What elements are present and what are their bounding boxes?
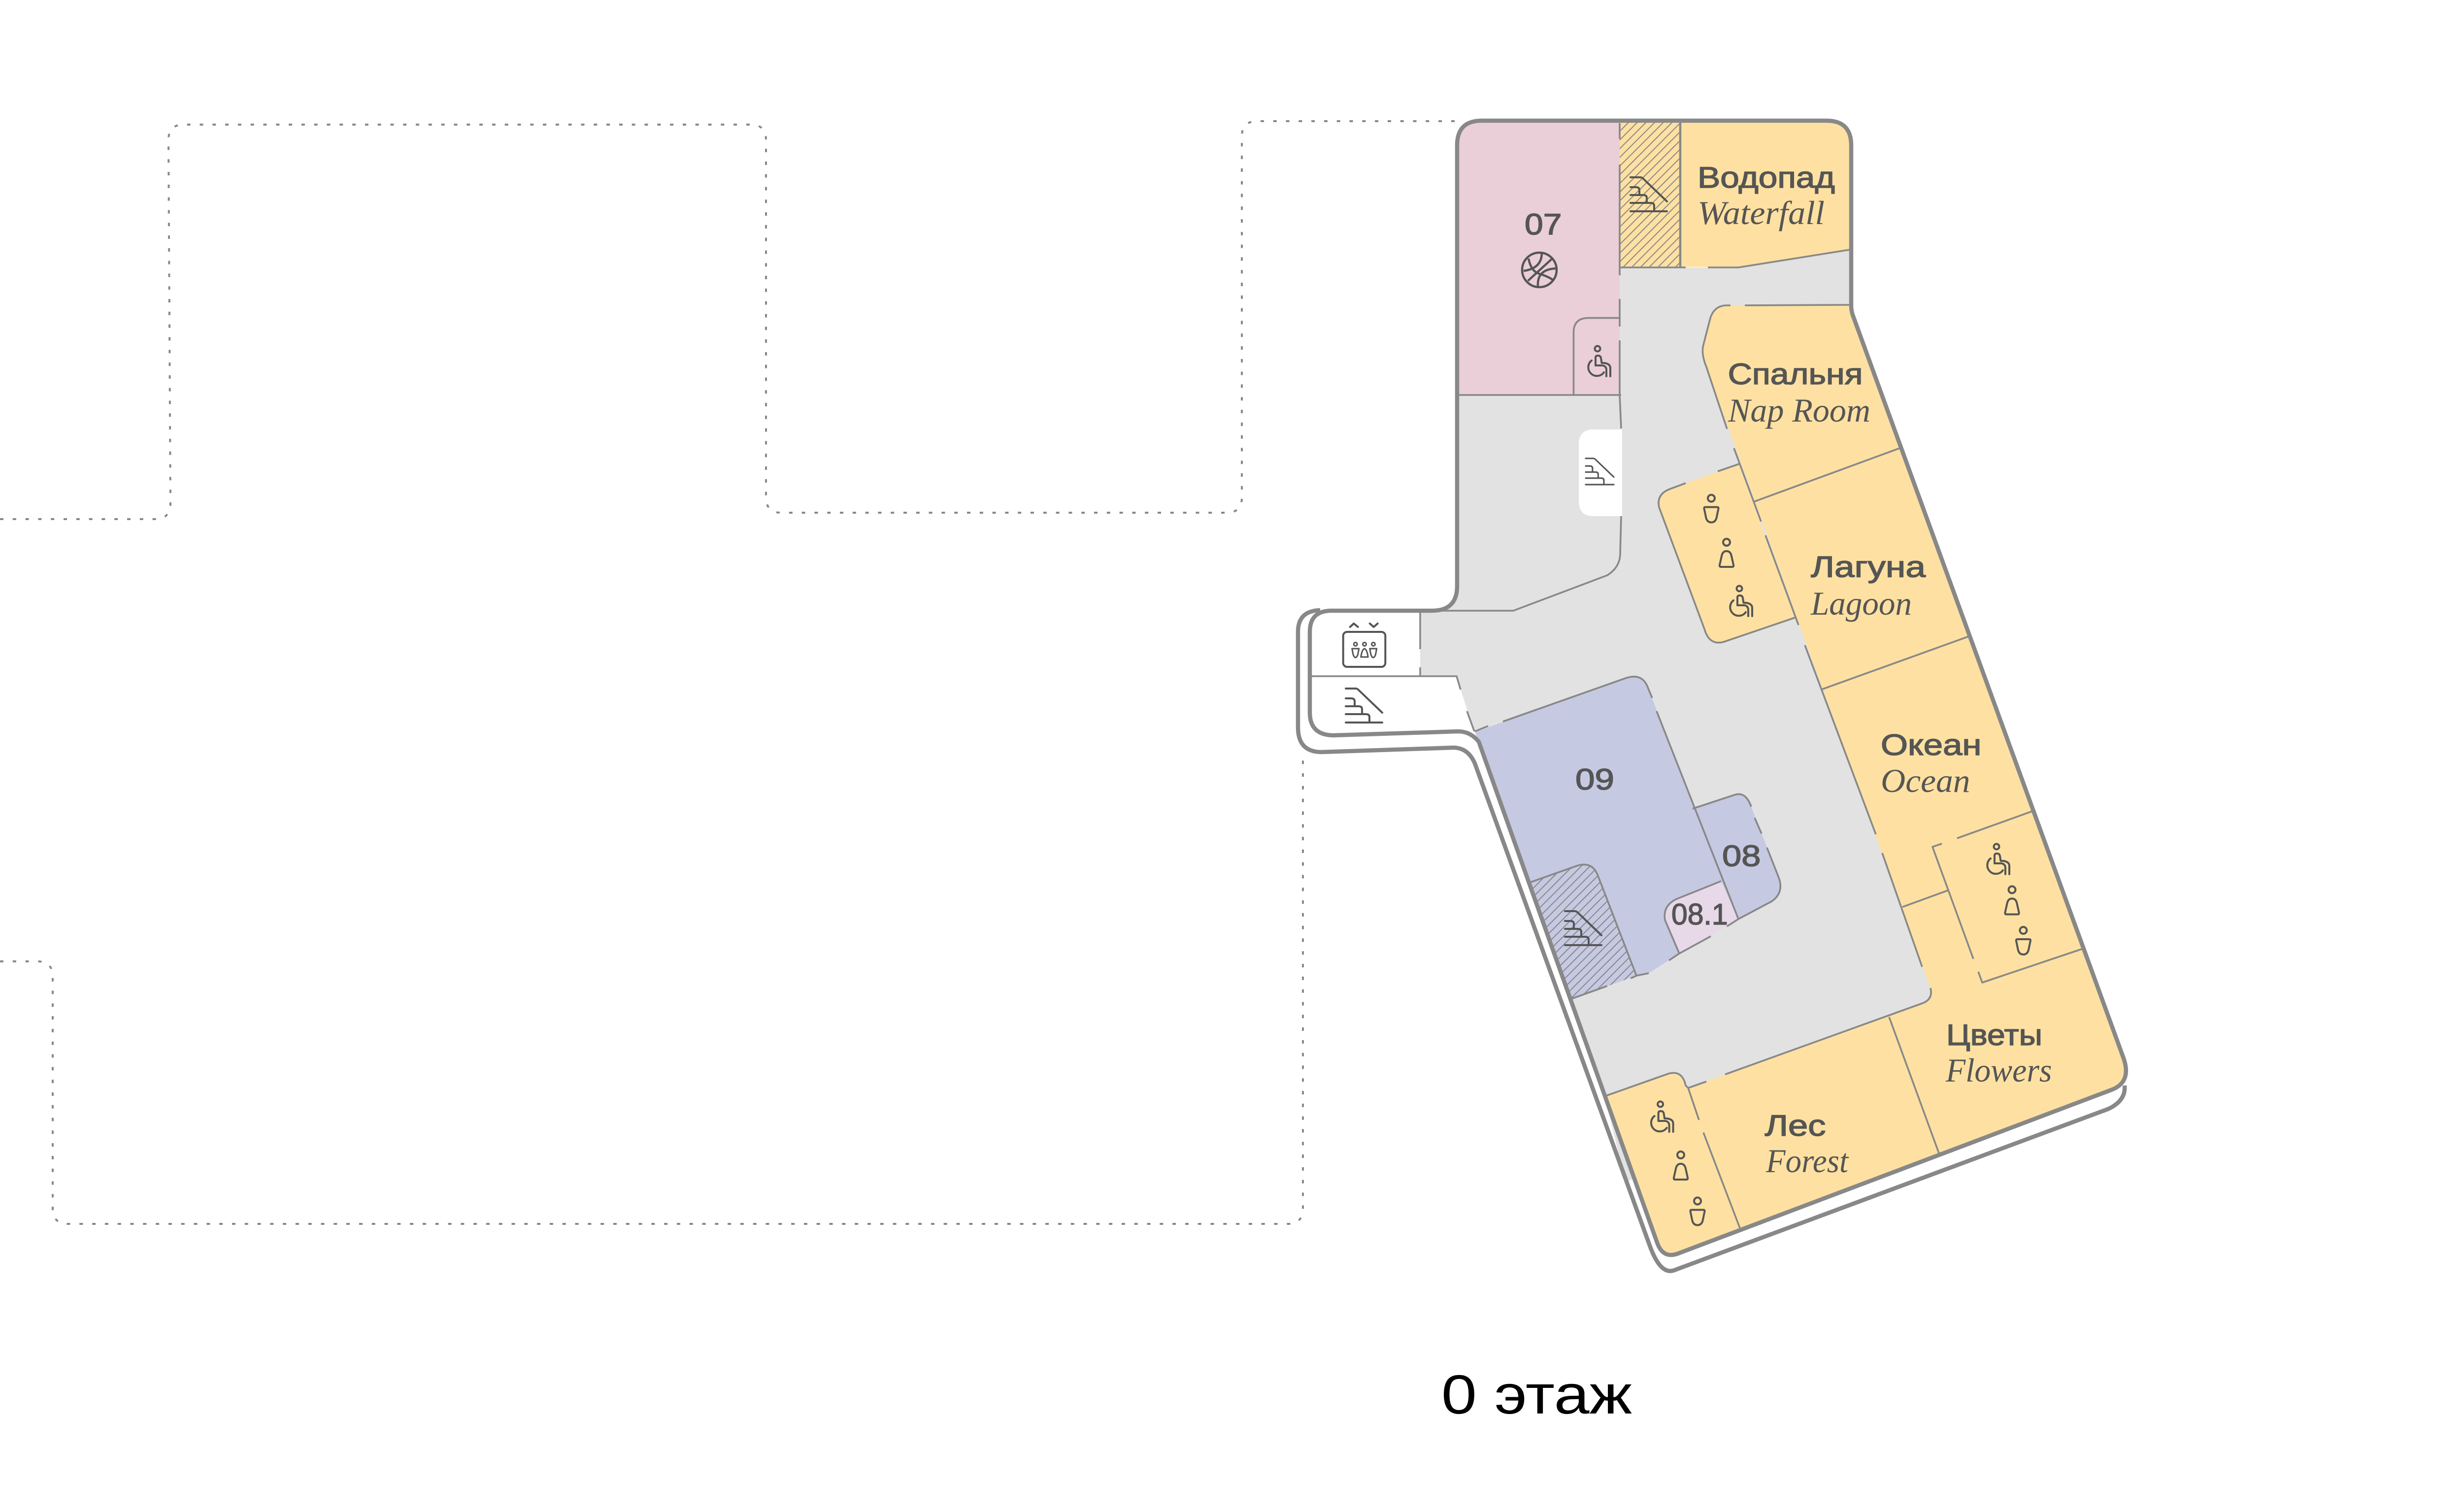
- label: Nap Room: Спальня: [1728, 358, 1863, 391]
- panel: room 07: [1457, 121, 1620, 395]
- icon: wheelchair, Ocean block: [1987, 844, 2009, 874]
- icon: wheelchair, room 07: [1588, 346, 1610, 376]
- panel: toilets block near Lagoon: [1659, 464, 1795, 643]
- label: Flowers: Flowers: [1945, 1052, 2052, 1089]
- label: Ocean: Океан: [1881, 728, 1981, 761]
- label: Nap Room: [1728, 358, 1870, 429]
- dotted outline: upper neighbouring building: [0, 121, 1457, 519]
- outer wall, outer line: [1298, 610, 2125, 1271]
- icon: lift: [1343, 624, 1385, 667]
- label: 08: 08: [1722, 839, 1761, 873]
- icon: toilet cup, Forest block: [1690, 1198, 1705, 1225]
- icon: stairs, top: [1631, 177, 1667, 211]
- label: Ocean: Ocean: [1881, 762, 1970, 799]
- icon: toilet cup, Ocean block: [2016, 927, 2030, 954]
- icon: stairs, lobby: [1346, 689, 1382, 723]
- label: 07: 07: [1525, 208, 1562, 241]
- label: Flowers: [1945, 1019, 2052, 1089]
- icon: wheelchair, Lagoon block: [1730, 586, 1752, 616]
- panel: hatched stairs in room 09: [1528, 864, 1636, 1000]
- title: 0 этаж: [1441, 1364, 1632, 1425]
- icon: toilet bell, Forest block: [1674, 1151, 1688, 1180]
- label: Waterfall: Waterfall: [1697, 194, 1825, 231]
- label: 09: 09: [1575, 763, 1614, 796]
- panel: yellow rooms along right wall: [1604, 305, 2126, 1255]
- label: Forest: Forest: [1765, 1142, 1849, 1180]
- icon: basketball: [1522, 253, 1557, 287]
- icon: toilet cup, Lagoon block: [1704, 495, 1719, 523]
- outer wall, inner line: [1310, 121, 2126, 1255]
- panel: room 08.1: [1664, 881, 1738, 953]
- icon: toilet bell, Ocean block: [2005, 887, 2019, 914]
- label: Lagoon: Лагуна: [1811, 551, 1926, 583]
- label: Forest: [1764, 1109, 1849, 1180]
- panel: room 09: [1475, 677, 1738, 1000]
- label: 08.1: 08.1: [1671, 898, 1728, 931]
- panel: room 08: [1693, 794, 1780, 919]
- icon: toilet bell, Lagoon block: [1720, 539, 1733, 567]
- room partitions: [1310, 123, 2083, 1229]
- label: Ocean: [1881, 728, 1981, 799]
- label: Nap Room: Nap Room: [1728, 392, 1870, 429]
- label: Forest: Лес: [1764, 1109, 1826, 1142]
- label: Lagoon: Lagoon: [1810, 585, 1912, 622]
- label: Flowers: Цветы: [1946, 1019, 2042, 1052]
- label: Waterfall: Водопад: [1697, 161, 1835, 194]
- panel: hatched stairs, top: [1620, 121, 1680, 267]
- icon: stairs, room 09: [1565, 911, 1601, 945]
- label: Lagoon: [1810, 551, 1926, 622]
- icon: stairs, niche: [1586, 459, 1614, 485]
- icon: wheelchair, Forest block: [1651, 1101, 1673, 1132]
- label: Waterfall: [1697, 161, 1835, 231]
- panel: white stair niche: [1579, 429, 1622, 516]
- panel: Waterfall room: [1680, 121, 1851, 267]
- dotted outline: lower neighbouring building: [0, 757, 1303, 1224]
- panel: grey corridor floor: [1420, 249, 1946, 1182]
